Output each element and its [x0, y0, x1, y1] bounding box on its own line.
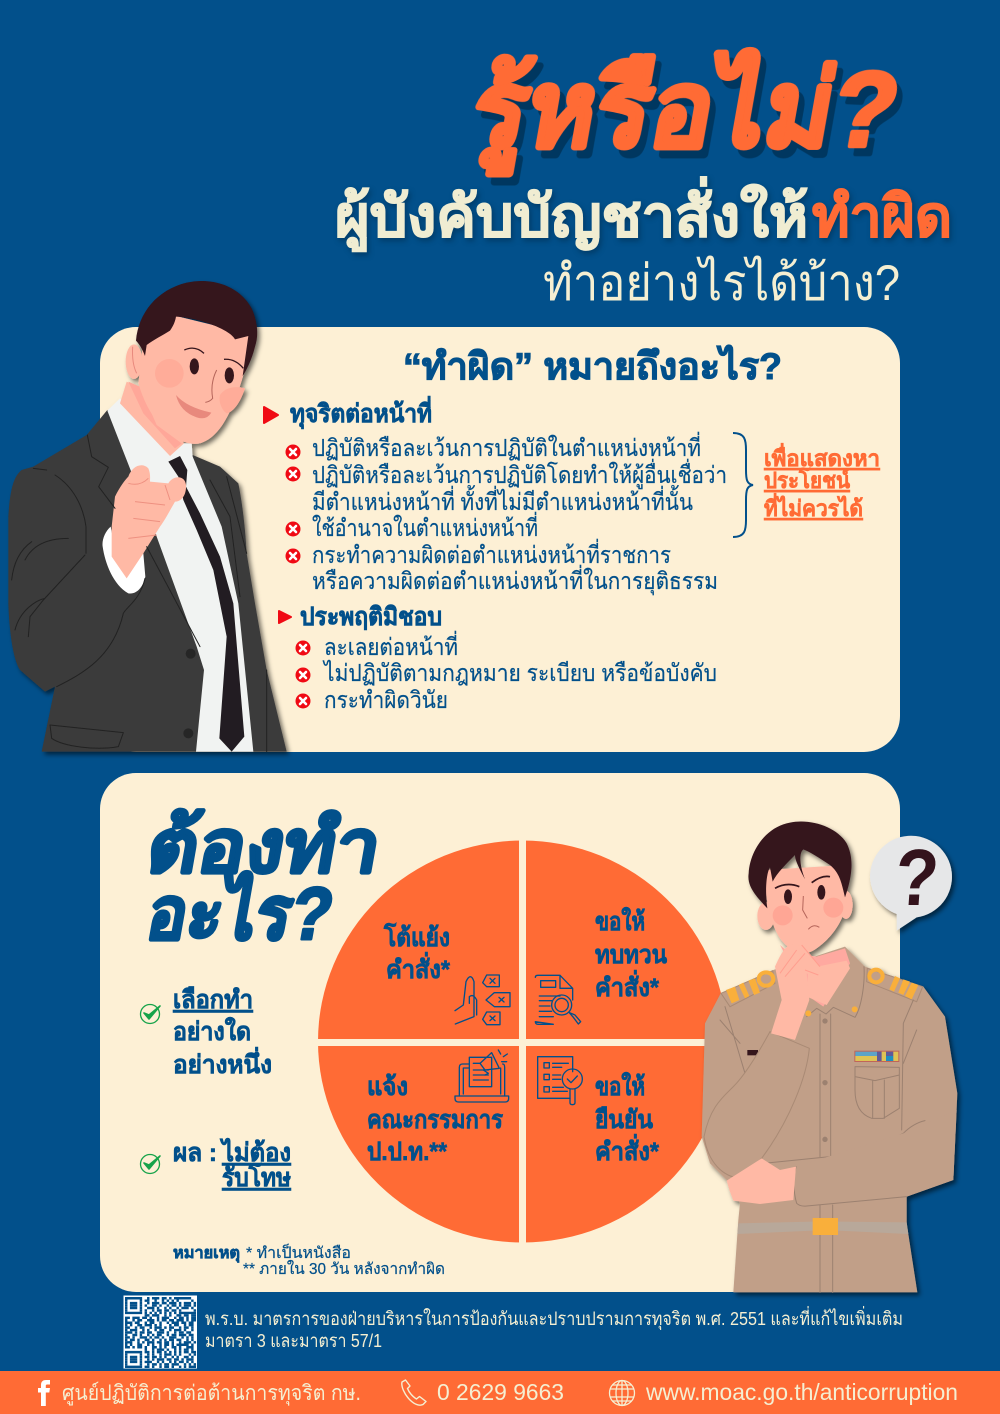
- heading: what must be done: อะไร?: [141, 871, 340, 955]
- footnote: [173, 1243, 445, 1278]
- footnote: * ทำเป็นหนังสือ: [246, 1243, 351, 1262]
- footnote: หมายเหตุ: [173, 1245, 240, 1263]
- checklist item: result: [140, 1137, 291, 1192]
- heading: what must be done: [141, 805, 388, 955]
- quadrant text: notify NACC: แจ้ง: [367, 1073, 408, 1101]
- result text: ผล :: [173, 1139, 217, 1167]
- icon: phone: [402, 1380, 426, 1405]
- list: corruption items: หรือความผิดต่อตำแหน่งหน้าที่ในการยุติธรรม: [312, 564, 718, 595]
- option text: เลือกทำ: [173, 986, 253, 1014]
- quadrant text: request review: [595, 906, 667, 1002]
- quadrant text: notify NACC: [367, 1073, 504, 1166]
- forearm sleeve: [704, 1032, 809, 1178]
- right sleeve cuff: [793, 1110, 957, 1206]
- pie chart: four options: [315, 835, 730, 1250]
- subtitle: [335, 176, 952, 252]
- list: corruption items: ใช้อำนาจในตำแหน่งหน้าที่: [312, 511, 538, 541]
- section: misconduct: [279, 603, 442, 631]
- icon: globe: [610, 1380, 634, 1406]
- footer bar: [0, 1371, 1000, 1414]
- illustration: thinking officer with question bubble: [702, 822, 957, 1292]
- legal reference: มาตรา 3 และมาตรา 57/1: [205, 1330, 382, 1351]
- belt buckle: [813, 1218, 838, 1235]
- quadrant text: object to the order: คำสั่ง*: [386, 952, 450, 984]
- list: misconduct items: กระทำผิดวินัย: [324, 687, 448, 713]
- quadrant text: notify NACC: คณะกรรมการ: [367, 1106, 504, 1134]
- option text: อย่างหนึ่ง: [173, 1047, 272, 1079]
- arrow marker: [279, 611, 291, 623]
- speech bubble: [870, 836, 952, 931]
- result text: รับโทษ: [222, 1162, 291, 1192]
- officer figure: [702, 822, 957, 1292]
- subtitle second line: ทำอย่างไรได้บ้าง?: [543, 255, 900, 311]
- subtitle: ทำผิด: [812, 185, 952, 249]
- icon: facebook: [38, 1380, 50, 1406]
- phone number: 0 2629 9663: [437, 1379, 564, 1405]
- callout: to obtain undue benefit: เพื่อแสดงหา: [764, 442, 880, 471]
- heading: what must be done: ต้องทำ: [141, 805, 388, 888]
- icon: check: [140, 1004, 160, 1024]
- quadrant text: object to the order: [383, 922, 450, 984]
- option text: [173, 986, 272, 1079]
- belt: [737, 1222, 908, 1234]
- checklist item: choose one: [140, 986, 272, 1079]
- quadrant text: request review: ขอให้: [595, 906, 645, 936]
- legal reference: พ.ร.บ. มาตรการของฝ่ายบริหารในการป้องกันและปราบปรามการทุจริต พ.ศ. 2551 และที่แก้ไขเพิ่มเติม: [205, 1306, 903, 1331]
- illustration: pointing man in suit: [8, 281, 287, 752]
- right epaulette: [867, 968, 923, 1002]
- resting hand: [727, 1158, 796, 1204]
- panel: meaning of wrongdoing: [100, 327, 900, 752]
- list: corruption items: กระทำความผิดต่อตำแหน่งหน้าที่ราชการ: [312, 538, 671, 568]
- subtitle: ผู้บังคับบัญชาสั่งให้: [335, 176, 808, 252]
- callout: to obtain undue benefit: ประโยชน์: [764, 467, 850, 493]
- list: corruption items: มีตำแหน่งหน้าที่ ทั้งที่ไม่มีตำแหน่งหน้าที่นั้น: [312, 485, 693, 515]
- organisation name: ศูนย์ปฏิบัติการต่อต้านการทุจริต กษ.: [62, 1381, 361, 1406]
- question mark: ?: [892, 832, 942, 922]
- list: misconduct items: ไม่ปฏิบัติตามกฎหมาย ระเบียบ หรือข้อบังคับ: [322, 660, 717, 686]
- quadrant text: request confirmation: ขอให้: [595, 1071, 645, 1101]
- quadrant text: request review: ทบทวน: [595, 941, 667, 969]
- option text: อย่างใด: [173, 1016, 251, 1046]
- section heading: ประพฤติมิชอบ: [300, 603, 442, 631]
- section: corruption: [264, 396, 432, 430]
- result text: ไม่ต้อง: [219, 1137, 291, 1167]
- callout: to obtain undue benefit: [764, 442, 880, 521]
- footnote: ** ภายใน 30 วัน หลังจากทำผิด: [243, 1260, 445, 1278]
- result text: [173, 1137, 291, 1192]
- arrow marker: [264, 407, 278, 423]
- quadrant text: request review: คำสั่ง*: [595, 970, 659, 1002]
- panel heading: “ทำผิด” หมายถึงอะไร?: [403, 344, 782, 387]
- icon: check: [140, 1154, 160, 1174]
- panel: what to do: [100, 773, 900, 1292]
- left epaulette: [721, 971, 775, 1007]
- collar lines, placket and pocket: [707, 967, 925, 1292]
- icon: document with magnifier: [535, 975, 581, 1024]
- icon: raised hand with rejected messages: [455, 975, 510, 1025]
- qr code: [124, 1296, 197, 1368]
- quadrant text: request confirmation: คำสั่ง*: [595, 1134, 659, 1166]
- list: corruption items: [286, 431, 727, 595]
- list: misconduct items: [296, 630, 717, 713]
- icon: checklist with magnifier: [538, 1057, 582, 1105]
- quadrant text: notify NACC: ป.ป.ท.**: [367, 1138, 447, 1166]
- brace: [733, 433, 753, 537]
- icon: laptop with megaphone: [455, 1050, 509, 1102]
- quadrant text: request confirmation: [595, 1071, 659, 1166]
- list: corruption items: ปฏิบัติหรือละเว้นการปฏิบัติโดยทำให้ผู้อื่นเชื่อว่า: [312, 458, 727, 490]
- website: www.moac.go.th/anticorruption: [645, 1379, 958, 1405]
- callout: to obtain undue benefit: ที่ไม่ควรได้: [764, 492, 863, 521]
- section heading: ทุจริตต่อหน้าที่: [290, 396, 432, 430]
- legal reference: [205, 1306, 903, 1351]
- ribbon bar: [854, 1051, 899, 1062]
- quadrant text: object to the order: โต้แย้ง: [383, 922, 450, 952]
- list: misconduct items: ละเลยต่อหน้าที่: [324, 630, 458, 660]
- list: corruption items: ปฏิบัติหรือละเว้นการปฏิบัติในตำแหน่งหน้าที่: [312, 431, 701, 461]
- hand on chin: [771, 944, 822, 1040]
- quadrant text: request confirmation: ยืนยัน: [595, 1106, 653, 1134]
- title: did you know: รู้หรือไม่?: [462, 49, 908, 176]
